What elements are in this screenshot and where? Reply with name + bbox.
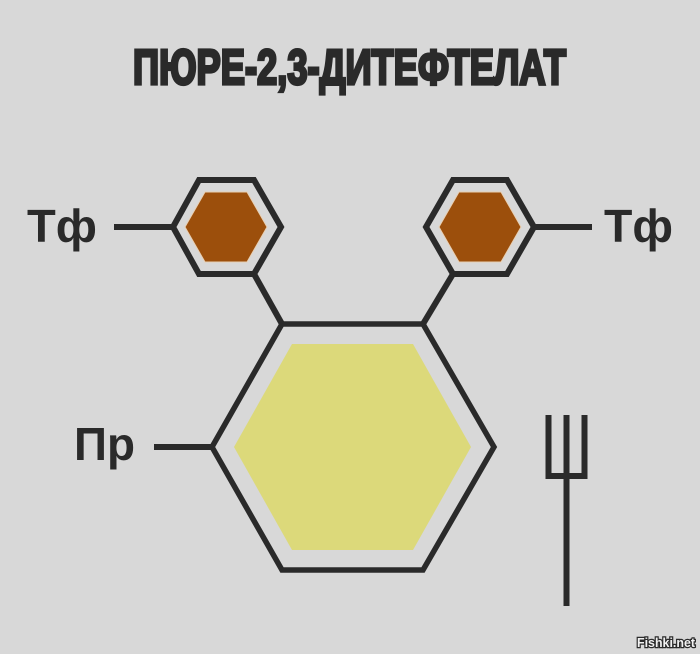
icon: fork — [548, 415, 584, 606]
label: left Тф: Тф — [27, 200, 97, 252]
watermark: Fishki.net — [637, 635, 696, 650]
label line: left Тф — [114, 224, 173, 230]
label: right Тф: Тф — [604, 200, 673, 252]
large hexagon group — [212, 324, 494, 570]
label line: right Тф — [534, 224, 592, 230]
bond: right small hexagon to large hexagon — [423, 274, 453, 324]
right small hexagon group — [426, 180, 534, 274]
left small hexagon group — [173, 180, 281, 274]
label: Пр: Пр — [74, 418, 135, 470]
bond: left small hexagon to large hexagon — [254, 274, 282, 324]
title: ПЮРЕ-2,3-ДИТЕФТЕЛАТ — [133, 41, 566, 95]
label line: Пр — [154, 444, 212, 450]
